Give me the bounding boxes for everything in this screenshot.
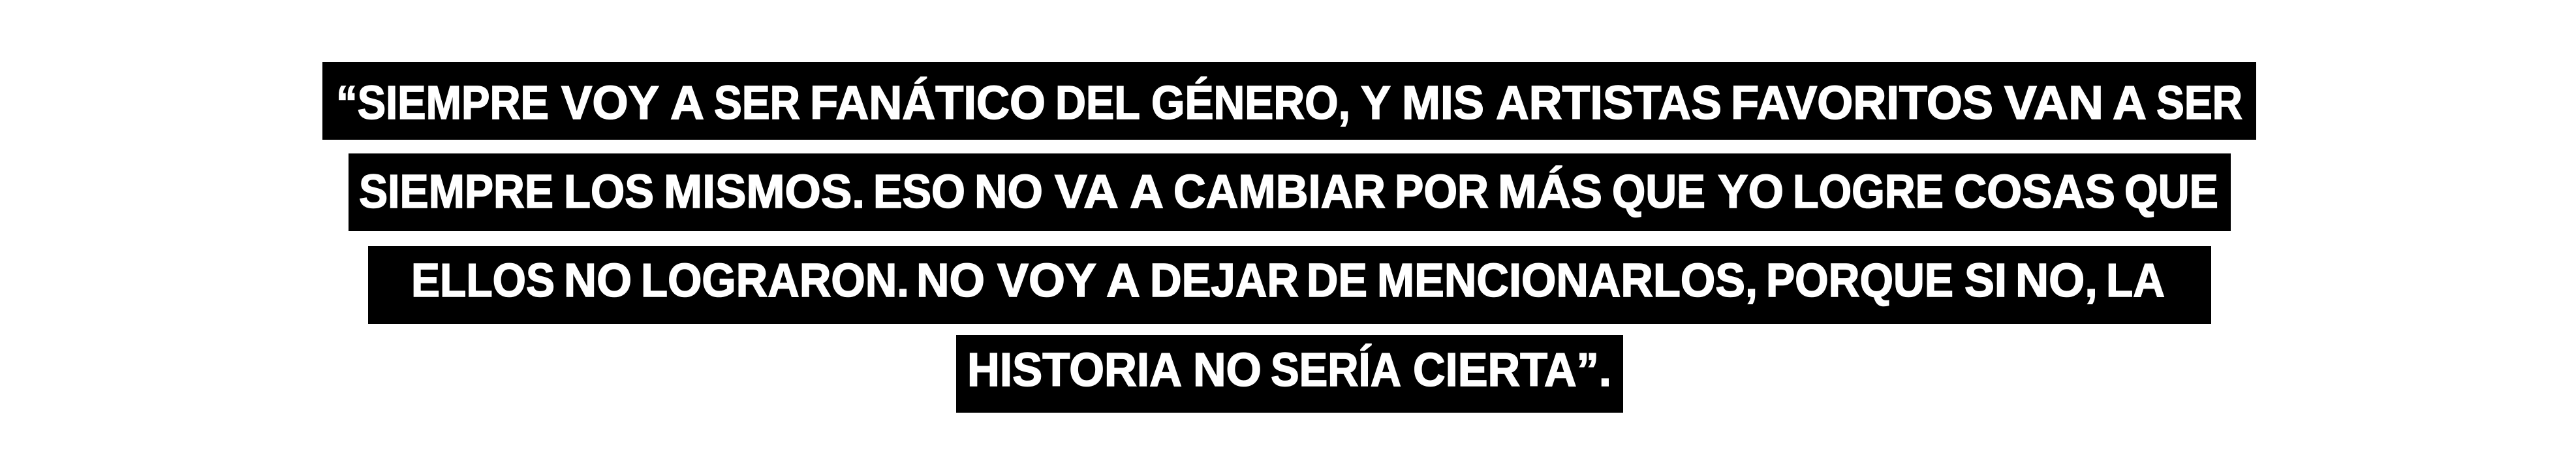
- quote line 1: “SIEMPRE: [336, 77, 549, 129]
- quote line 1: DEL: [1055, 77, 1140, 129]
- quote line 2: QUE: [2124, 166, 2218, 218]
- quote line 3: VOY: [997, 255, 1096, 307]
- quote line 1: A: [2113, 77, 2147, 129]
- quote line 2: MISMOS.: [664, 166, 865, 218]
- quote line 1: ARTISTAS: [1496, 77, 1722, 129]
- quote line 4: NO: [1193, 344, 1262, 396]
- quote line 3: LOGRARON.: [641, 255, 909, 307]
- quote line 2: POR: [1395, 166, 1489, 218]
- quote line 1: A: [670, 77, 704, 129]
- quote line 2: NO: [974, 166, 1043, 218]
- quote line 1: SER: [714, 77, 800, 129]
- quote line 1: FANÁTICO: [810, 77, 1046, 129]
- quote line 3: LA: [2106, 255, 2165, 307]
- quote line 3: SI: [1964, 255, 2007, 307]
- quote line 3: DE: [1307, 255, 1367, 307]
- quote line 3: ELLOS: [411, 255, 555, 307]
- quote line 2: MÁS: [1498, 166, 1602, 218]
- quote line 4: SERÍA: [1271, 344, 1401, 396]
- quote line 1: FAVORITOS: [1731, 77, 1993, 129]
- quote line 2: CAMBIAR: [1173, 166, 1386, 218]
- quote line 3: A: [1106, 255, 1140, 307]
- quote line 2: A: [1130, 166, 1164, 218]
- quote line 1: VAN: [2004, 77, 2103, 129]
- quote line 4: [956, 335, 1623, 413]
- quote line 2: LOS: [564, 166, 654, 218]
- quote line 4: CIERTA”.: [1413, 344, 1611, 396]
- quote line 3: [368, 246, 2211, 324]
- quote line 2: SIEMPRE: [359, 166, 553, 218]
- quote line 1: SER: [2156, 77, 2242, 129]
- quote line 2: QUE: [1612, 166, 1705, 218]
- quote line 1: VOY: [561, 77, 659, 129]
- quote line 3: NO: [916, 255, 985, 307]
- quote line 3: NO,: [2015, 255, 2098, 307]
- quote line 3: DEJAR: [1150, 255, 1299, 307]
- quote line 2: ESO: [873, 166, 965, 218]
- quote line 3: PORQUE: [1766, 255, 1953, 307]
- quote line 4: HISTORIA: [967, 344, 1182, 396]
- quote line 2: YO: [1718, 166, 1784, 218]
- quote line 3: MENCIONARLOS,: [1377, 255, 1758, 307]
- quote line 1: MIS: [1402, 77, 1484, 129]
- quote line 2: COSAS: [1954, 166, 2115, 218]
- quote line 1: GÉNERO,: [1151, 77, 1350, 129]
- quote line 2: VA: [1055, 166, 1119, 218]
- quote line 2: [349, 153, 2231, 231]
- quote line 2: LOGRE: [1793, 166, 1944, 218]
- quote line 3: NO: [564, 255, 632, 307]
- quote line 1: Y: [1361, 77, 1391, 129]
- quote line 1: [322, 62, 2256, 140]
